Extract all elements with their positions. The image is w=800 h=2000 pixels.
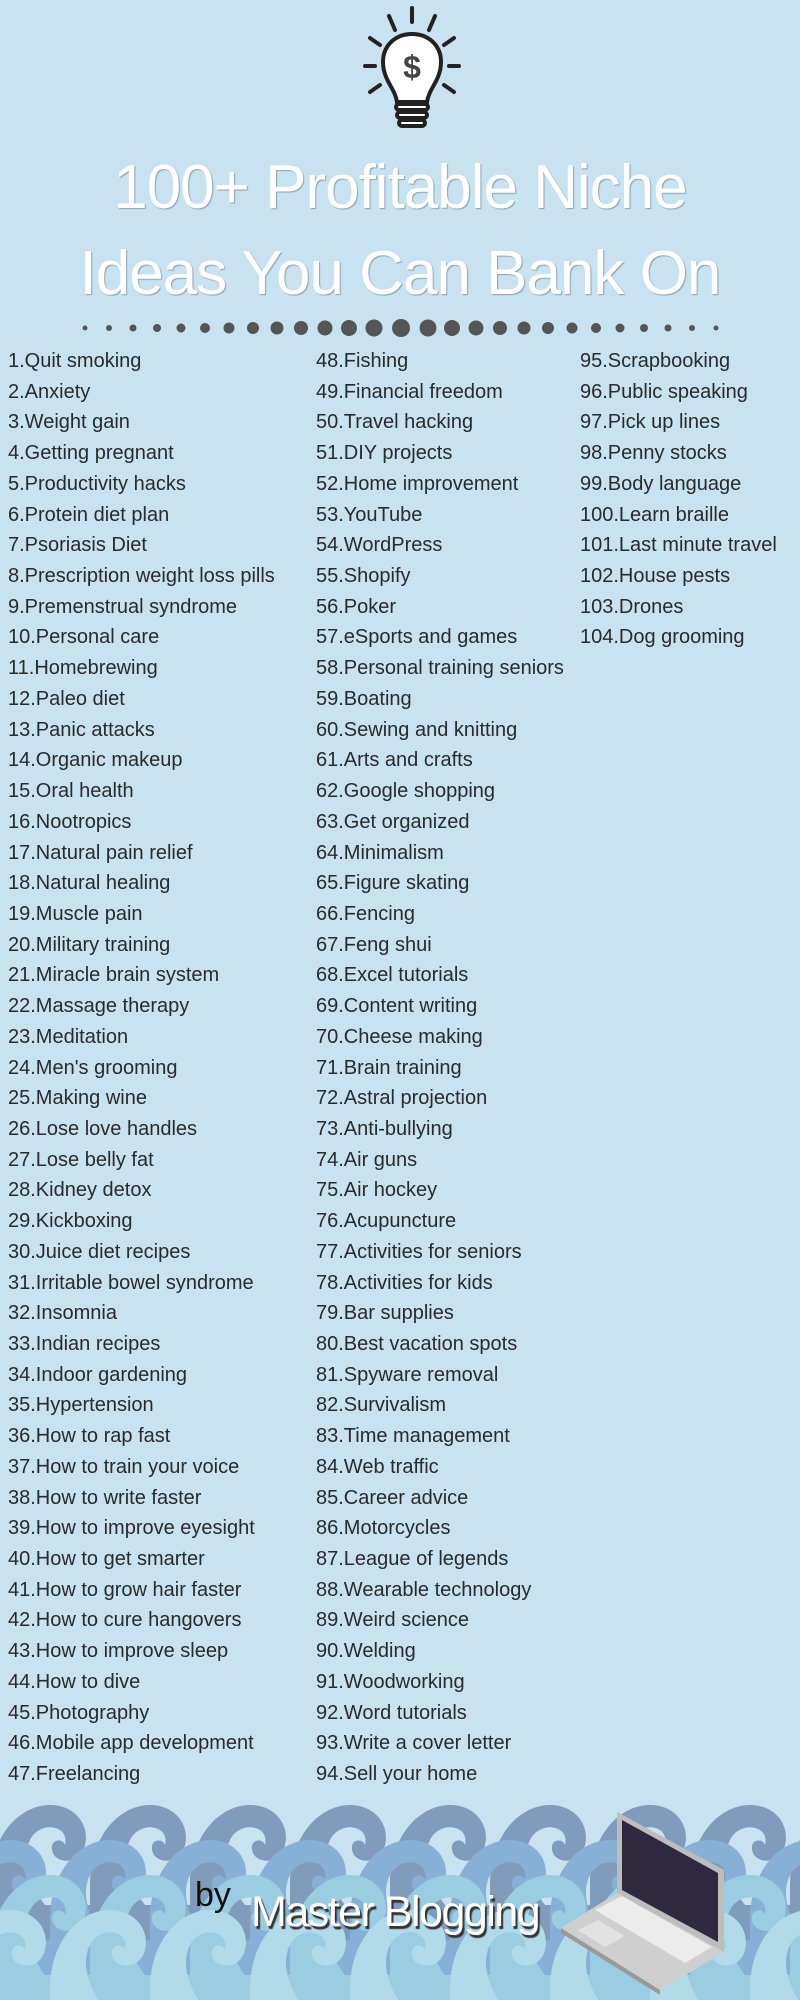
- list column 2: 85.Career advice: [316, 1487, 468, 1509]
- list column 1: 20.Military training: [8, 934, 170, 956]
- list column 2: 63.Get organized: [316, 811, 469, 833]
- list column 2: 73.Anti-bullying: [316, 1118, 453, 1140]
- list column 2: 77.Activities for seniors: [316, 1241, 522, 1263]
- list column 3: 103.Drones: [580, 596, 683, 618]
- dotted divider: [82, 319, 718, 337]
- title: 100+ Profitable Niche: [113, 153, 687, 222]
- icon: light bulb with dollar: [363, 6, 461, 128]
- list column 2: 86.Motorcycles: [316, 1517, 450, 1539]
- list column 2: 59.Boating: [316, 688, 412, 710]
- list column 2: 88.Wearable technology: [316, 1579, 531, 1601]
- list column 1: 19.Muscle pain: [8, 903, 143, 925]
- list column 1: 4.Getting pregnant: [8, 442, 174, 464]
- list column 2: 81.Spyware removal: [316, 1364, 498, 1386]
- list column 1: 34.Indoor gardening: [8, 1364, 187, 1386]
- list column 2: 54.WordPress: [316, 534, 442, 556]
- list column 3: 98.Penny stocks: [580, 442, 727, 464]
- list column 2: 92.Word tutorials: [316, 1702, 467, 1724]
- list column 3: 97.Pick up lines: [580, 411, 720, 433]
- list column 1: 12.Paleo diet: [8, 688, 125, 710]
- list column 1: 13.Panic attacks: [8, 719, 155, 741]
- list column 1: 43.How to improve sleep: [8, 1640, 228, 1662]
- list column 2: 65.Figure skating: [316, 872, 469, 894]
- list column 1: 10.Personal care: [8, 626, 159, 648]
- list column 3: 101.Last minute travel: [580, 534, 777, 556]
- list column 2: 55.Shopify: [316, 565, 411, 587]
- icon: light bulb with dollar: $: [403, 49, 421, 85]
- list column 2: 84.Web traffic: [316, 1456, 439, 1478]
- list column 3: [580, 350, 777, 648]
- list column 2: [316, 350, 564, 1785]
- list column 3: 99.Body language: [580, 473, 741, 495]
- icon: laptop: [561, 1812, 724, 1995]
- list column 1: 26.Lose love handles: [8, 1118, 197, 1140]
- list column 1: 32.Insomnia: [8, 1302, 117, 1324]
- list column 2: 58.Personal training seniors: [316, 657, 564, 679]
- list column 1: 35.Hypertension: [8, 1394, 154, 1416]
- list column 3: 102.House pests: [580, 565, 730, 587]
- list column 2: 62.Google shopping: [316, 780, 495, 802]
- credit text: Master Blogging: [251, 1888, 539, 1936]
- title: Ideas You Can Bank On: [80, 239, 720, 308]
- list column 2: 79.Bar supplies: [316, 1302, 454, 1324]
- credit text: [195, 1876, 540, 1939]
- list column 1: 33.Indian recipes: [8, 1333, 160, 1355]
- list column 2: 57.eSports and games: [316, 626, 517, 648]
- footer waves: [0, 1805, 800, 2000]
- list column 1: 31.Irritable bowel syndrome: [8, 1272, 254, 1294]
- list column 1: 39.How to improve eyesight: [8, 1517, 255, 1539]
- credit text: by: [195, 1876, 231, 1914]
- list column 2: 90.Welding: [316, 1640, 416, 1662]
- list column 1: 2.Anxiety: [8, 381, 90, 403]
- list column 2: 94.Sell your home: [316, 1763, 477, 1785]
- list column 3: 104.Dog grooming: [580, 626, 745, 648]
- list column 2: 91.Woodworking: [316, 1671, 465, 1693]
- list column 1: 45.Photography: [8, 1702, 149, 1724]
- list column 1: 8.Prescription weight loss pills: [8, 565, 275, 587]
- list column 2: 53.YouTube: [316, 504, 422, 526]
- list column 1: 3.Weight gain: [8, 411, 130, 433]
- list column 2: 76.Acupuncture: [316, 1210, 456, 1232]
- list column 2: 70.Cheese making: [316, 1026, 483, 1048]
- list column 2: 50.Travel hacking: [316, 411, 473, 433]
- list column 1: 30.Juice diet recipes: [8, 1241, 190, 1263]
- list column 1: 18.Natural healing: [8, 872, 170, 894]
- list column 1: 28.Kidney detox: [8, 1179, 151, 1201]
- list column 2: 74.Air guns: [316, 1149, 417, 1171]
- title: [80, 153, 720, 308]
- list column 1: 25.Making wine: [8, 1087, 147, 1109]
- list column 2: 83.Time management: [316, 1425, 510, 1447]
- list column 1: 5.Productivity hacks: [8, 473, 186, 495]
- list column 1: 47.Freelancing: [8, 1763, 140, 1785]
- list column 2: 68.Excel tutorials: [316, 964, 468, 986]
- list column 1: 21.Miracle brain system: [8, 964, 219, 986]
- list column 2: 89.Weird science: [316, 1609, 469, 1631]
- list column 1: 41.How to grow hair faster: [8, 1579, 241, 1601]
- list column 3: 100.Learn braille: [580, 504, 729, 526]
- list column 1: 46.Mobile app development: [8, 1732, 254, 1754]
- list column 2: 66.Fencing: [316, 903, 415, 925]
- list column 2: 51.DIY projects: [316, 442, 452, 464]
- list column 1: 23.Meditation: [8, 1026, 128, 1048]
- list column 1: 15.Oral health: [8, 780, 134, 802]
- list column 2: 87.League of legends: [316, 1548, 508, 1570]
- list column 2: 78.Activities for kids: [316, 1272, 493, 1294]
- list column 2: 49.Financial freedom: [316, 381, 503, 403]
- list column 2: 71.Brain training: [316, 1057, 462, 1079]
- list column 3: 96.Public speaking: [580, 381, 748, 403]
- list column 1: 14.Organic makeup: [8, 749, 183, 771]
- list column 1: 16.Nootropics: [8, 811, 131, 833]
- list column 1: [8, 350, 275, 1785]
- list column 2: 52.Home improvement: [316, 473, 518, 495]
- list column 2: 60.Sewing and knitting: [316, 719, 517, 741]
- list column 1: 24.Men's grooming: [8, 1057, 177, 1079]
- list column 2: 80.Best vacation spots: [316, 1333, 517, 1355]
- list column 1: 11.Homebrewing: [8, 657, 158, 679]
- list column 2: 56.Poker: [316, 596, 396, 618]
- list column 2: 93.Write a cover letter: [316, 1732, 511, 1754]
- list column 1: 1.Quit smoking: [8, 350, 141, 372]
- list column 1: 40.How to get smarter: [8, 1548, 205, 1570]
- list column 2: 48.Fishing: [316, 350, 408, 372]
- list column 1: 42.How to cure hangovers: [8, 1609, 241, 1631]
- list column 1: 9.Premenstrual syndrome: [8, 596, 237, 618]
- list column 1: 37.How to train your voice: [8, 1456, 239, 1478]
- list column 1: 22.Massage therapy: [8, 995, 189, 1017]
- list column 1: 6.Protein diet plan: [8, 504, 169, 526]
- list column 2: 67.Feng shui: [316, 934, 432, 956]
- list column 1: 38.How to write faster: [8, 1487, 201, 1509]
- list column 2: 64.Minimalism: [316, 842, 444, 864]
- list column 1: 29.Kickboxing: [8, 1210, 133, 1232]
- list column 2: 61.Arts and crafts: [316, 749, 473, 771]
- list column 2: 82.Survivalism: [316, 1394, 446, 1416]
- list column 2: 69.Content writing: [316, 995, 477, 1017]
- list column 2: 72.Astral projection: [316, 1087, 487, 1109]
- list column 1: 27.Lose belly fat: [8, 1149, 154, 1171]
- list column 1: 17.Natural pain relief: [8, 842, 193, 864]
- list column 1: 7.Psoriasis Diet: [8, 534, 147, 556]
- list column 1: 36.How to rap fast: [8, 1425, 170, 1447]
- list column 1: 44.How to dive: [8, 1671, 140, 1693]
- list column 3: 95.Scrapbooking: [580, 350, 730, 372]
- list column 2: 75.Air hockey: [316, 1179, 437, 1201]
